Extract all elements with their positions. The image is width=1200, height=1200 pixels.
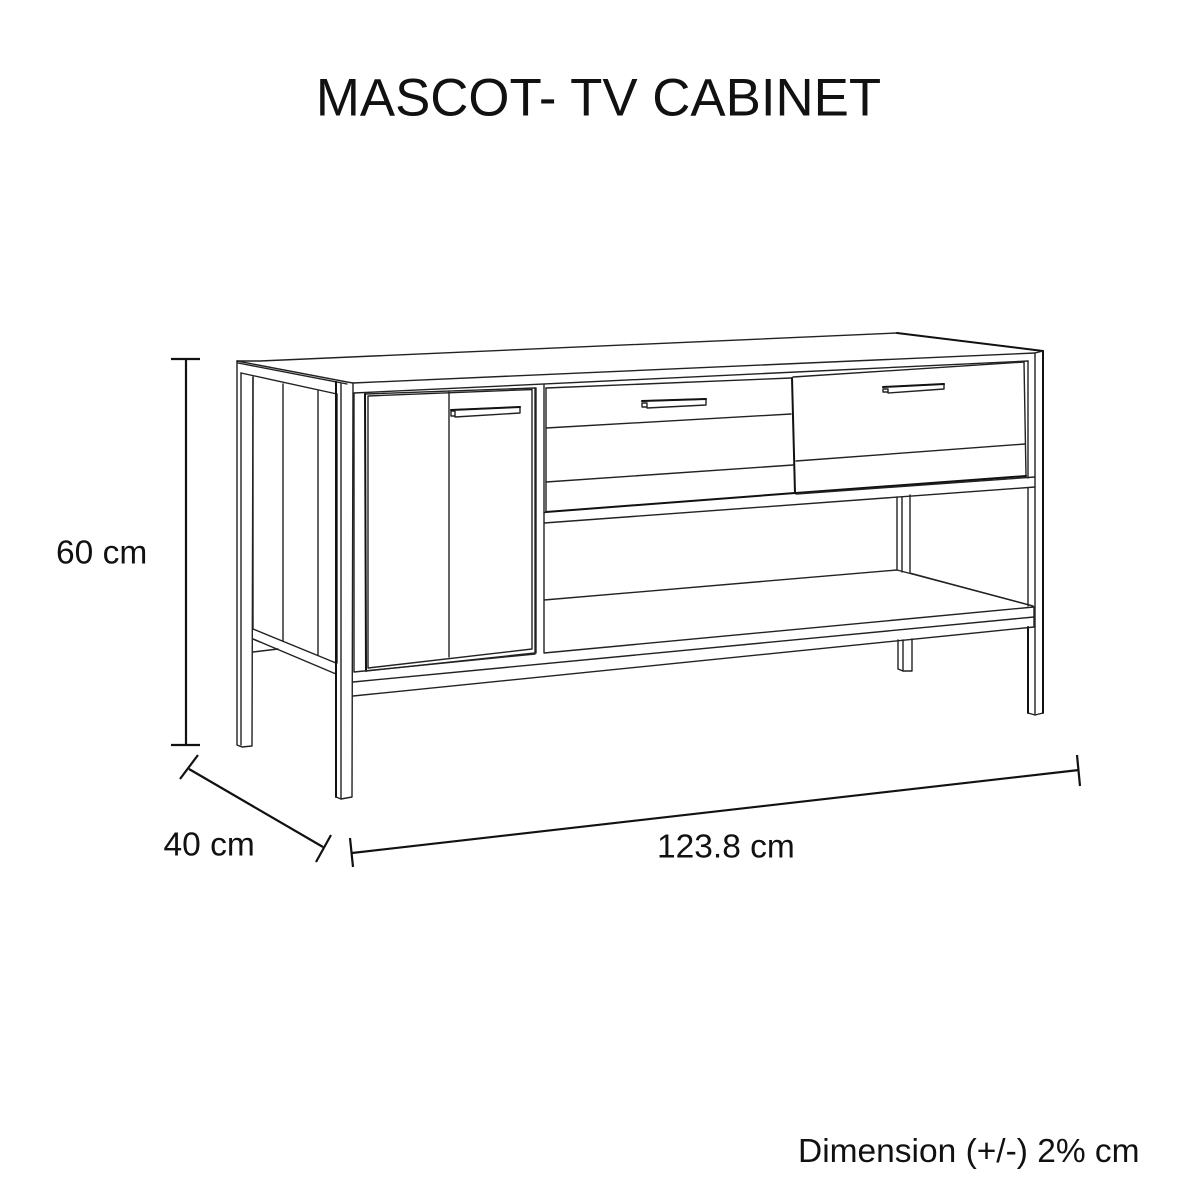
cabinet door — [365, 388, 535, 671]
right drawer handle — [883, 384, 944, 393]
cabinet top surface — [237, 333, 1043, 393]
rear right leg — [897, 495, 912, 671]
front left leg — [336, 382, 353, 799]
tolerance note: Dimension (+/-) 2% cm — [798, 1133, 1140, 1170]
width dimension line — [350, 755, 1080, 867]
lower shelf — [353, 570, 1034, 696]
left drawer — [546, 378, 795, 512]
depth label: 40 cm — [164, 826, 255, 864]
rail below drawers — [544, 361, 1035, 523]
height label: 60 cm — [56, 534, 147, 572]
right drawer — [793, 362, 1026, 493]
depth dimension line — [180, 755, 331, 862]
back left leg — [237, 361, 253, 747]
right front leg — [1028, 351, 1043, 715]
title: MASCOT- TV CABINET — [316, 68, 881, 128]
width label: 123.8 cm — [657, 828, 795, 866]
cabinet line drawing — [237, 333, 1043, 799]
door handle — [451, 407, 520, 417]
left drawer handle — [642, 399, 706, 408]
height dimension line — [171, 359, 200, 745]
centre column — [354, 385, 544, 672]
left side panel with frame — [241, 373, 337, 745]
